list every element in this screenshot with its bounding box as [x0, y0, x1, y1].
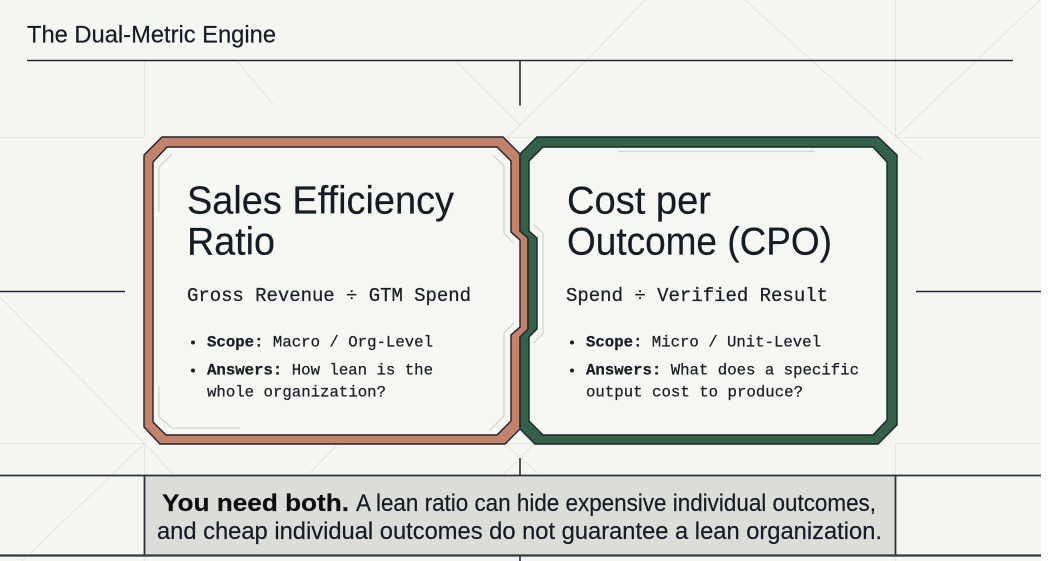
band fill	[144, 475, 896, 555]
formula: Spend ÷ Verified Result	[566, 285, 828, 307]
callout band: A lean ratio can hide expensive individual outcomes,	[356, 490, 876, 517]
panel: sales efficiency ratio: Ratio	[187, 220, 275, 264]
decorative inner lines	[534, 152, 815, 343]
panel: sales efficiency ratio	[144, 137, 528, 444]
panel: cost per outcome: Outcome (CPO)	[567, 220, 832, 264]
bullet: answers: Answers: What does a specific	[586, 362, 859, 380]
frame: terracotta	[144, 137, 528, 444]
decorative inner lines	[159, 154, 514, 430]
band rules	[0, 475, 1041, 555]
bullet: scope: Scope: Macro / Org-Level	[207, 334, 433, 352]
bullet: answers: Answers: How lean is the	[207, 362, 433, 380]
formula: Gross Revenue ÷ GTM Spend	[187, 285, 471, 307]
panel: cost per outcome	[520, 137, 897, 444]
callout band: and cheap individual outcomes do not guarantee a lean organization.	[157, 518, 882, 545]
callout text: You need both.	[162, 490, 349, 517]
bullet: answers: whole organization?	[207, 384, 386, 402]
bullet: answers: output cost to produce?	[586, 384, 803, 402]
bullet: answers	[191, 362, 433, 402]
panel fill	[529, 147, 887, 435]
heading: Cost per	[567, 180, 711, 222]
callout band	[0, 475, 1041, 556]
bullet: scope: Scope: Micro / Unit-Level	[586, 334, 821, 352]
title: The Dual-Metric Engine	[27, 22, 276, 48]
panel fill	[153, 147, 520, 435]
heading: Sales Efficiency	[187, 180, 454, 222]
frame: green	[520, 137, 897, 444]
bullet: answers	[570, 362, 859, 402]
